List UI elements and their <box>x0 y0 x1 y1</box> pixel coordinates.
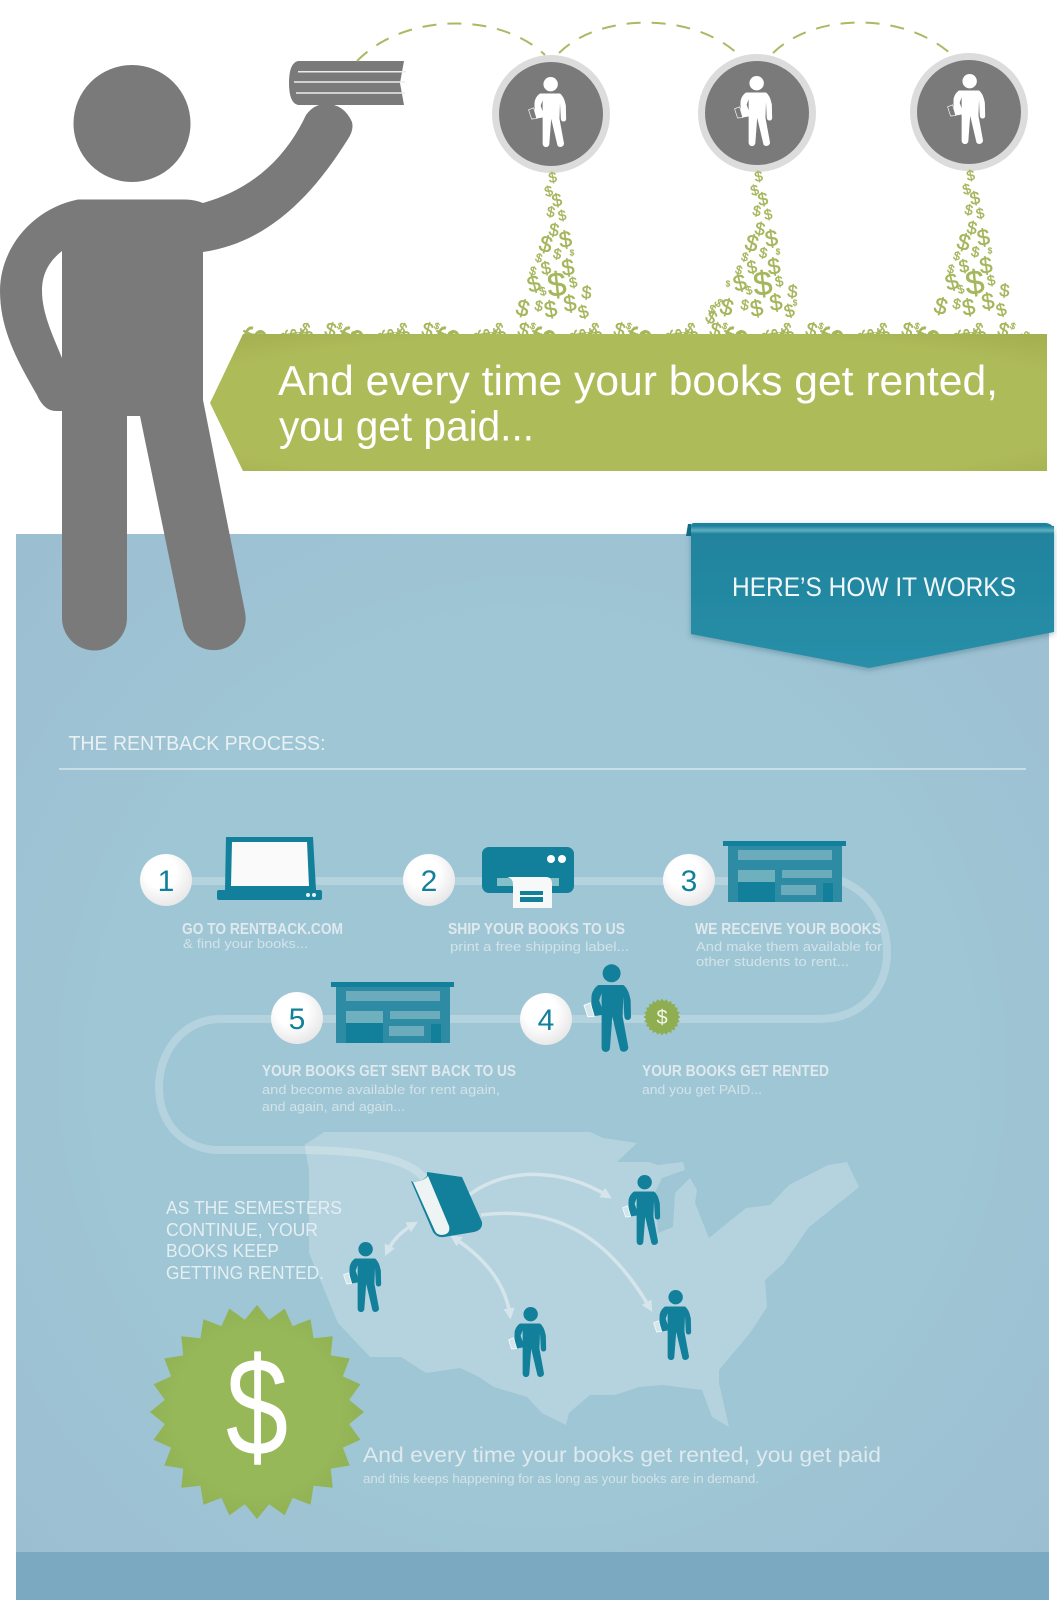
step 4: and you get PAID... <box>642 1082 762 1097</box>
text: semesters continue <box>166 1197 342 1283</box>
renter: south <box>509 1307 546 1377</box>
icon: teal book <box>411 1172 482 1237</box>
dollar pile along banner top: $$$$$$$$ <box>280 327 974 341</box>
dollar pile along banner top: $$$$$$$$$ <box>249 328 1034 343</box>
reader circle 3 <box>910 53 1028 171</box>
text: semesters continue: AS THE SEMESTERS <box>166 1197 342 1218</box>
step 4: $ <box>656 1007 668 1029</box>
badge: large dollar: $ <box>226 1328 288 1485</box>
dollar fountain 1 <box>513 170 592 323</box>
banner: every time your books get rented: you get paid... <box>279 402 534 450</box>
renter: west <box>344 1242 381 1312</box>
text: semesters continue: BOOKS KEEP <box>166 1240 279 1261</box>
step 5: 5 <box>289 1003 305 1036</box>
step 5: and become available for rent again, <box>262 1082 500 1097</box>
dollar fountain 2: $ <box>751 264 774 304</box>
step 1 <box>140 837 343 951</box>
step 4: 4 <box>538 1004 554 1037</box>
step 3: other students to rent... <box>696 954 849 969</box>
step 3 <box>663 841 883 969</box>
badge: large dollar <box>150 1305 364 1519</box>
dollar fountain 3: $ <box>988 246 993 256</box>
text: semesters continue: CONTINUE, YOUR <box>166 1219 318 1240</box>
dollar fountain 3: $ <box>963 263 986 303</box>
step 4 <box>520 964 829 1097</box>
banner: every time your books get rented <box>210 334 1047 471</box>
dollar pile along banner top: $$$$$$$$ <box>294 327 992 345</box>
dollar pile along banner top: $$$$$$$$ <box>274 329 969 348</box>
step 4: YOUR BOOKS GET RENTED <box>642 1063 829 1080</box>
banner: every time your books get rented: And every time your books get rented, <box>278 357 998 404</box>
text: semesters continue: GETTING RENTED. <box>166 1262 324 1283</box>
step 5 <box>262 982 516 1114</box>
reader circle 1 <box>492 55 610 173</box>
step 5: YOUR BOOKS GET SENT BACK TO US <box>262 1063 516 1080</box>
dollar fountain 2: $$$$$$$ <box>717 224 784 322</box>
closing text: And every time your books get rented, you get paid <box>363 1444 881 1467</box>
dashed arcs between readers <box>357 22 952 61</box>
step 2: SHIP YOUR BOOKS TO US <box>448 921 625 938</box>
dollar fountain 1: $$$$$$$ <box>513 225 578 323</box>
dollar fountain 3 <box>931 168 1010 321</box>
large figure holding book <box>0 65 352 650</box>
step 1: GO TO RENTBACK.COM <box>182 921 343 938</box>
closing text <box>363 1444 881 1486</box>
footer band <box>16 1552 1049 1600</box>
dollar fountain 1: $ <box>545 265 568 305</box>
dollar fountain 2: $$$$$ <box>707 249 754 317</box>
dollar fountain 3: $$$$$$$ <box>951 168 997 313</box>
step 2: 2 <box>421 865 437 898</box>
step 3: 3 <box>681 865 697 898</box>
dollar fountain 1: $$$$$ <box>539 190 592 323</box>
renter: east <box>654 1290 691 1360</box>
dollar fountain 2: $$$$$$ <box>702 189 798 328</box>
dollar pile along banner top: $$$$$$$$ <box>336 320 1017 332</box>
reader circle 2 <box>698 54 816 172</box>
step 2 <box>403 847 629 954</box>
dollar fountain 3: $$$ <box>946 248 966 297</box>
panel: how it works background <box>16 534 1049 1600</box>
dollar pile along banner top: $$$$$$$$ <box>322 319 1012 343</box>
dollar fountain 1: $ <box>570 248 575 258</box>
arrows from book to renters <box>387 1174 650 1315</box>
step 2: print a free shipping label... <box>450 939 629 954</box>
dollar fountain 3: $$$$$ <box>957 188 1010 321</box>
dollar fountain 2: $$$$$$$ <box>739 169 785 314</box>
dollar fountain 1: $$$ <box>528 250 548 299</box>
dollar fountain 1: $$$$$$$ <box>533 170 579 315</box>
ribbon: here's how it works: HERE’S HOW IT WORKS <box>732 572 1016 602</box>
dollar pile along banner top: $$$$$$$$ <box>297 319 986 338</box>
step 5: and again, and again... <box>262 1099 405 1114</box>
ribbon: here's how it works <box>686 523 1054 668</box>
renter: north <box>623 1175 660 1245</box>
dollar fountain 2: $$$ <box>726 248 798 308</box>
map of the United States <box>304 1132 859 1427</box>
process path line <box>159 881 887 1178</box>
dollar pile along banner top: $$$$$$$$ <box>235 320 948 352</box>
step 1: 1 <box>158 865 174 898</box>
heading: the rentback process: THE RENTBACK PROCESS: <box>68 733 326 755</box>
dollar fountain 3: $$$$$$$ <box>931 223 996 321</box>
closing text: and this keeps happening for as long as your books are in demand. <box>363 1472 759 1486</box>
icon: book above hand <box>289 61 406 105</box>
step 3: WE RECEIVE YOUR BOOKS <box>695 921 881 938</box>
step 1: & find your books... <box>183 936 308 951</box>
step 3: And make them available for <box>696 939 883 954</box>
